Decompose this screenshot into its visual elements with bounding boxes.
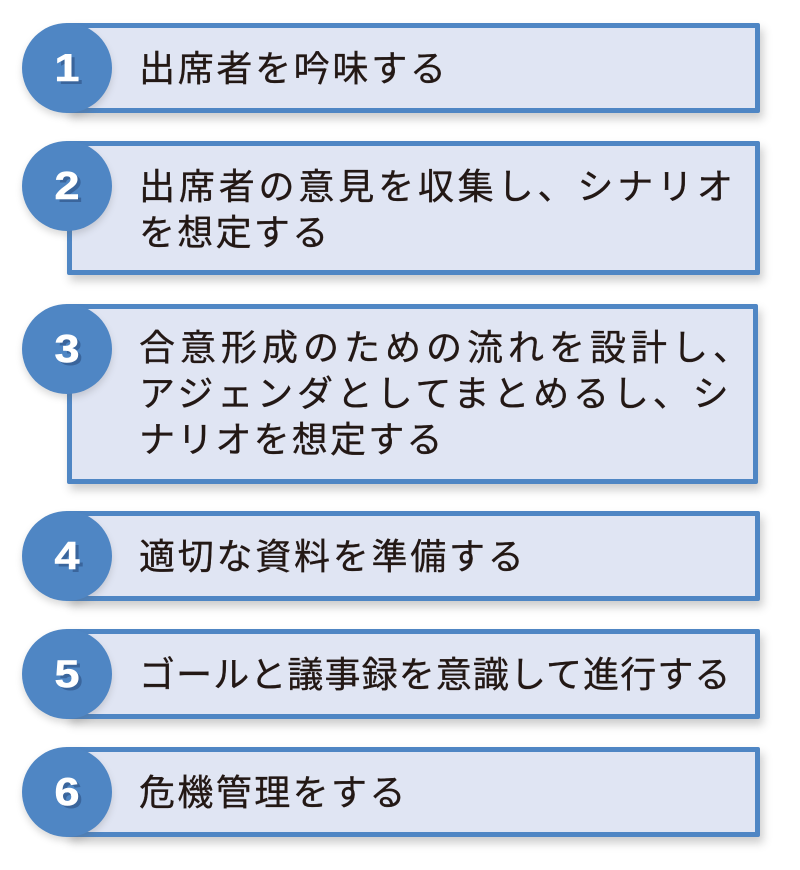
step 4 number badge: 4 [55, 535, 79, 578]
step 3 text [139, 327, 754, 460]
step 6 box [67, 747, 760, 837]
step 2 number badge [22, 141, 112, 231]
step 4 text: 適切な資料を準備する [139, 536, 527, 577]
step 2 number badge: 2 [55, 165, 79, 208]
step 2 box [67, 141, 760, 275]
step 6 number badge: 6 [55, 771, 79, 814]
step 2 text: を想定する [139, 212, 331, 253]
step 3 text: ナリオを想定する [139, 419, 445, 460]
step 3 number badge: 3 [55, 328, 79, 371]
step 3 number badge [22, 304, 112, 394]
step 2 text: 出席者の意見を収集し、シナリオ [139, 166, 737, 207]
step 1 [20, 23, 767, 123]
step 5 number badge [22, 629, 112, 719]
step 4 [20, 511, 767, 611]
step 3 text: アジェンダとしてまとめるし、シ [139, 373, 732, 414]
step 2 text [139, 166, 737, 253]
step 1 number badge: 1 [55, 47, 79, 90]
step 4 box [67, 511, 760, 601]
step 5 box [67, 629, 760, 719]
step 3 [20, 304, 765, 494]
step 1 text: 出席者を吟味する [139, 48, 449, 89]
step 5 [20, 629, 767, 729]
step 5 text: ゴールと議事録を意識して進行する [139, 654, 732, 695]
step 1 box [67, 23, 760, 113]
step 6 number badge [22, 747, 112, 837]
step 3 box [67, 304, 758, 484]
step 2 [20, 141, 767, 285]
step 6 [20, 747, 767, 847]
step 5 number badge: 5 [55, 653, 79, 696]
step 6 text: 危機管理をする [139, 772, 408, 813]
step 4 number badge [22, 511, 112, 601]
step 1 number badge [22, 23, 112, 113]
step 3 text: 合意形成のための流れを設計し、 [139, 327, 754, 368]
